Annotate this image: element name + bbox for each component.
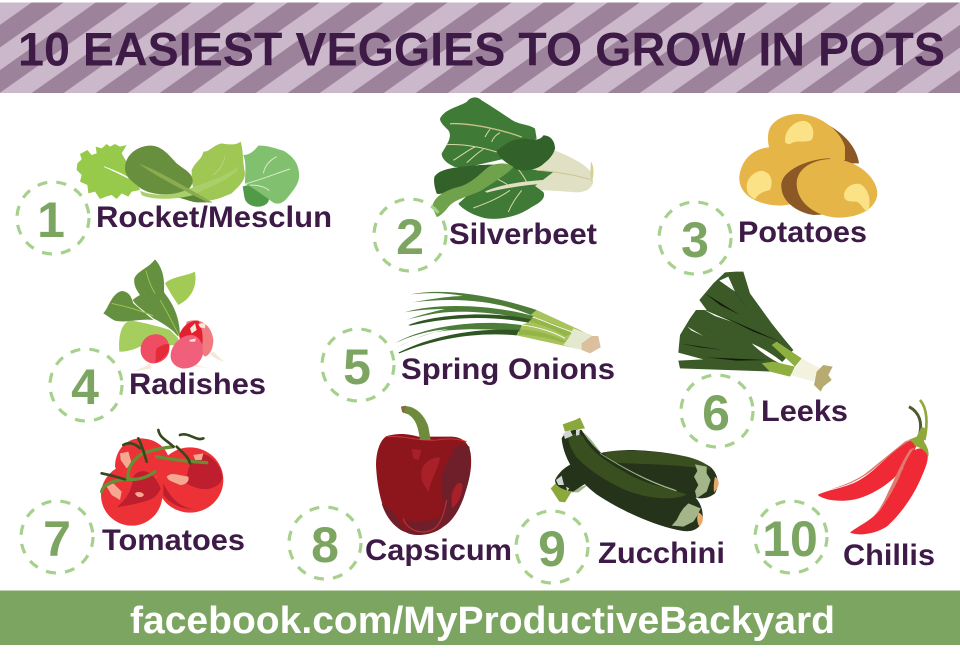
label: Silverbeet: Silverbeet — [449, 218, 597, 251]
header banner — [0, 2, 960, 93]
label: Chillis: Chillis — [843, 539, 935, 572]
number badge 6 — [681, 375, 753, 447]
number badge 5: 5 — [343, 339, 371, 395]
number badge 9 — [516, 511, 588, 583]
label: Potatoes: Potatoes — [738, 216, 867, 249]
number badge 5 — [322, 329, 394, 401]
number badge 9: 9 — [538, 521, 566, 577]
label: Rocket/Mesclun: Rocket/Mesclun — [96, 201, 332, 234]
icon: leeks — [678, 272, 833, 392]
label: Radishes: Radishes — [129, 368, 266, 401]
number badge 7 — [21, 501, 93, 573]
icon: spring onions — [395, 292, 601, 353]
icon: capsicum — [376, 406, 471, 535]
footer banner — [0, 590, 960, 645]
label: Zucchini: Zucchini — [598, 537, 725, 570]
number badge 3: 3 — [681, 212, 709, 268]
icon: silverbeet — [432, 97, 593, 219]
number badge 2: 2 — [396, 209, 424, 265]
icon: potatoes — [739, 114, 877, 218]
number badge 2 — [374, 199, 446, 271]
title: 10 EASIEST VEGGIES TO GROW IN POTS — [18, 22, 945, 76]
footer text: facebook.com/MyProductiveBackyard — [130, 600, 835, 642]
icon: zucchini — [551, 418, 719, 531]
label: Capsicum: Capsicum — [365, 534, 512, 567]
number badge 8 — [289, 507, 361, 579]
number badge 10: 10 — [762, 511, 818, 567]
number badge 3 — [659, 202, 731, 274]
icon: radishes — [103, 259, 224, 372]
icon: rocket and mesclun leaves — [77, 142, 299, 207]
number badge 7: 7 — [43, 511, 71, 567]
label: Spring Onions: Spring Onions — [401, 353, 615, 386]
icon: chillis — [818, 400, 929, 534]
number badge 4: 4 — [71, 359, 99, 415]
label: Leeks: Leeks — [761, 395, 848, 428]
number badge 1 — [17, 182, 89, 254]
number badge 6: 6 — [702, 385, 730, 441]
number badge 4 — [50, 349, 122, 421]
number badge 10 — [755, 501, 827, 573]
label: Tomatoes: Tomatoes — [102, 524, 245, 557]
number badge 1: 1 — [37, 192, 65, 248]
icon: tomatoes — [101, 430, 223, 526]
number badge 8: 8 — [311, 517, 339, 573]
